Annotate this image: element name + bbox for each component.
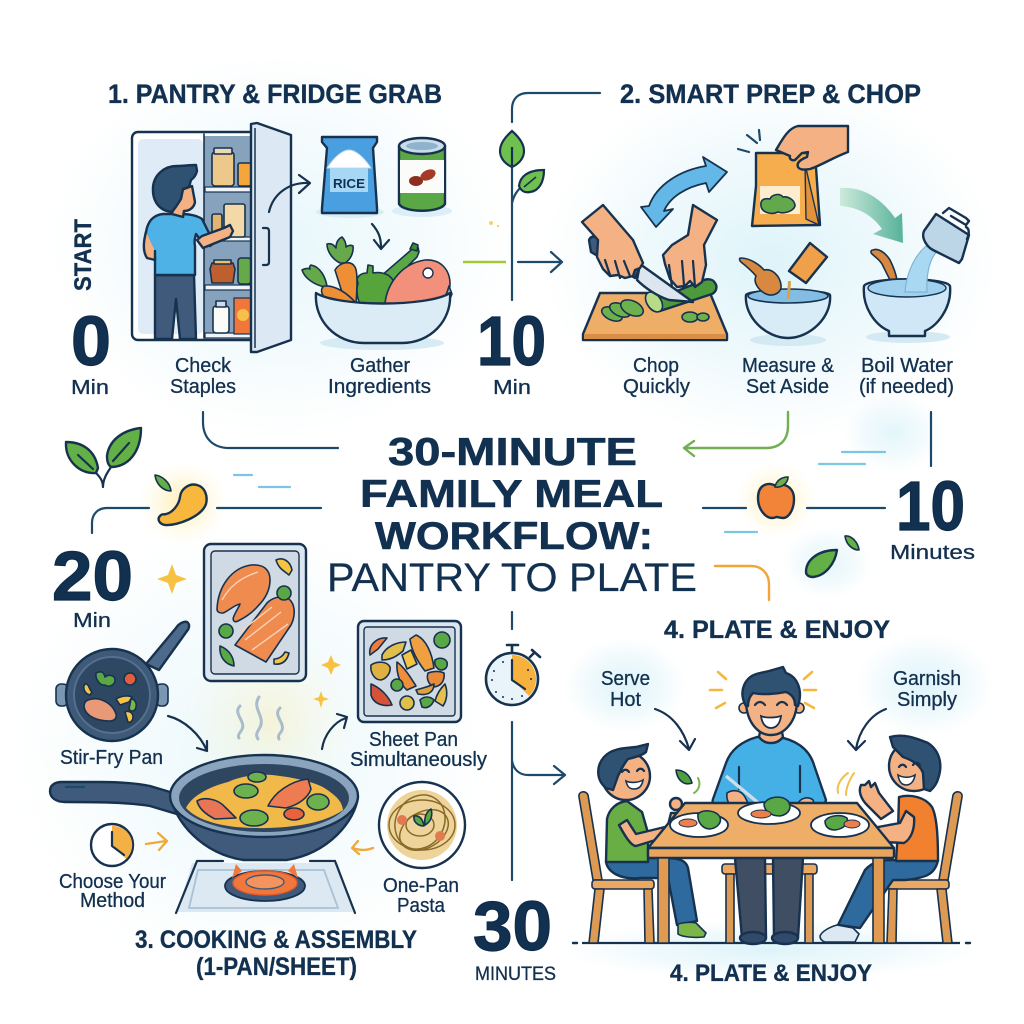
chairs — [579, 792, 962, 943]
labels: garnish simply — [893, 668, 961, 711]
icon: leaves left — [66, 428, 141, 487]
labels: garnish simply: Simply — [897, 689, 957, 711]
labels: chop quickly: Chop — [633, 355, 679, 377]
plate: left — [670, 811, 728, 837]
icon: joy rays — [710, 672, 816, 708]
icon: salmon sheet tray — [204, 544, 306, 681]
timeline: start 0 min: 0 — [71, 302, 111, 380]
arrow: down to bowl — [372, 224, 389, 249]
heading: step 4 top: 4. PLATE & ENJOY — [664, 616, 890, 644]
labels: one-pan pasta: Pasta — [397, 895, 446, 917]
title: WORKFLOW: — [375, 515, 653, 558]
labels: stir-fry pan: Stir-Fry Pan — [60, 747, 163, 769]
panel: step 3 cooking and assembly — [50, 544, 487, 981]
labels: serve hot: Serve — [601, 668, 650, 690]
labels: gather ingredients: Ingredients — [328, 376, 431, 398]
timeline: 10 minutes: 10 — [896, 467, 965, 545]
labels: measure and set aside: Measure & — [742, 355, 835, 377]
icon: small leaves right — [806, 536, 859, 577]
labels: check staples — [170, 355, 236, 398]
labels: gather ingredients — [328, 355, 431, 398]
connector: orange curve — [715, 566, 769, 600]
figure: father — [713, 667, 826, 944]
arrow: garnish — [848, 709, 886, 750]
timeline: 30 minutes: 30 — [473, 887, 552, 965]
icon: chopping board with hands — [582, 205, 727, 340]
floor line — [573, 942, 970, 944]
icon: rice bag — [316, 137, 384, 218]
icon: stopwatch — [486, 645, 540, 705]
connector: left curve to title — [203, 412, 338, 448]
timeline: start 0 min: START — [70, 219, 97, 291]
heading: step 2: 2. SMART PREP & CHOP — [620, 79, 921, 109]
icon: sparkles — [157, 564, 341, 708]
arrow: serve hot — [655, 709, 695, 750]
timeline: 10 min: 10 — [477, 302, 546, 380]
plate: right — [811, 813, 869, 837]
panel: step 4 plate and enjoy — [573, 616, 970, 987]
icon: pasta plate — [379, 782, 465, 868]
labels: gather ingredients: Gather — [350, 355, 410, 377]
panel: step 2 smart prep and chop — [582, 79, 969, 398]
icon: vegetable sheet tray — [358, 621, 461, 722]
icon: bean can — [392, 138, 452, 217]
title: FAMILY MEAL — [360, 473, 663, 516]
person — [144, 165, 233, 339]
labels: chop quickly — [623, 355, 690, 398]
arrow: clock to pan — [146, 833, 167, 850]
arrow: stir-fry to big pan — [168, 716, 207, 751]
connector: right side lines — [703, 412, 931, 508]
icon: large frying pan — [50, 755, 358, 860]
icon: fridge with person — [132, 123, 291, 352]
labels: boil water: Boil Water — [861, 355, 953, 377]
labels: measure and set aside — [742, 355, 835, 398]
labels: boil water — [859, 355, 954, 398]
connector: plant stem with leaves — [463, 93, 600, 300]
figure: boy right — [820, 736, 940, 942]
title: 30-MINUTE — [388, 431, 637, 474]
arrow: fridge to ingredients — [269, 175, 310, 212]
decorative dashes left — [234, 475, 290, 487]
icon: orange swirl with leaf — [155, 475, 207, 525]
timeline: 20 min: Min — [73, 610, 111, 632]
connector: centre line with arrow — [512, 612, 565, 880]
icon: steam — [238, 697, 282, 739]
labels: serve hot — [601, 668, 650, 711]
heading: step 3: (1-PAN/SHEET) — [196, 953, 357, 981]
labels: garnish simply: Garnish — [893, 668, 961, 690]
arrow: pasta to pan — [352, 841, 373, 854]
title — [327, 431, 697, 600]
labels: measure and set aside: Set Aside — [746, 376, 829, 398]
timeline: start 0 min — [70, 219, 111, 399]
timeline: 10 min: Min — [493, 377, 531, 399]
heading: step 3: 3. COOKING & ASSEMBLY — [135, 926, 417, 954]
labels: one-pan pasta — [383, 875, 459, 917]
icon: stove burner — [176, 861, 355, 913]
connector: 20 min line — [92, 508, 321, 533]
labels: choose your method: Choose Your — [59, 871, 166, 893]
arrow: to sheet pan — [322, 714, 347, 749]
table with plates — [648, 797, 894, 943]
labels: sheet pan simultaneously — [350, 729, 487, 771]
labels: one-pan pasta: One-Pan — [383, 875, 459, 897]
heading: step 4 bottom: 4. PLATE & ENJOY — [670, 960, 872, 987]
timeline: 10 minutes: Minutes — [890, 542, 975, 564]
arrow: green to title — [684, 412, 788, 456]
heading: step 3 — [135, 926, 417, 981]
plate: centre — [738, 797, 800, 824]
timeline: 30 minutes: MINUTES — [475, 964, 556, 985]
panel: step 1 pantry and fridge grab — [108, 79, 452, 398]
icon: garnish leaf and swirls — [676, 770, 854, 795]
labels: serve hot: Hot — [610, 689, 641, 711]
timeline: 20 min: 20 — [52, 537, 133, 615]
icon: ingredient bag with hand — [738, 126, 848, 226]
labels: sheet pan simultaneously: Sheet Pan — [369, 729, 458, 751]
icon: rice bag: RICE — [333, 176, 365, 191]
labels: boil water: (if needed) — [859, 376, 954, 398]
labels: choose your method — [59, 871, 166, 912]
heading: step 1: 1. PANTRY & FRIDGE GRAB — [108, 79, 442, 109]
figure: boy left — [598, 744, 706, 937]
labels: choose your method: Method — [80, 890, 145, 912]
decorative dashes right — [725, 452, 885, 532]
labels: sheet pan simultaneously: Simultaneously — [350, 749, 487, 771]
icon: clock choose method — [91, 824, 133, 866]
arrow: curved green — [840, 188, 903, 243]
labels: chop quickly: Quickly — [623, 376, 690, 398]
arrow: double-headed blue — [641, 157, 727, 227]
icon: bowl of vegetables — [302, 237, 452, 350]
icon: stir-fry pan — [56, 622, 189, 741]
labels: check staples: Check — [175, 355, 232, 377]
icon: mixing bowl with spoon and packet — [740, 243, 830, 346]
icon: boiling water bowl and pitcher — [864, 208, 969, 343]
timeline: start 0 min: Min — [71, 377, 109, 399]
title: PANTRY TO PLATE — [327, 556, 697, 600]
labels: check staples: Staples — [170, 376, 236, 398]
icon: apple — [758, 477, 794, 518]
